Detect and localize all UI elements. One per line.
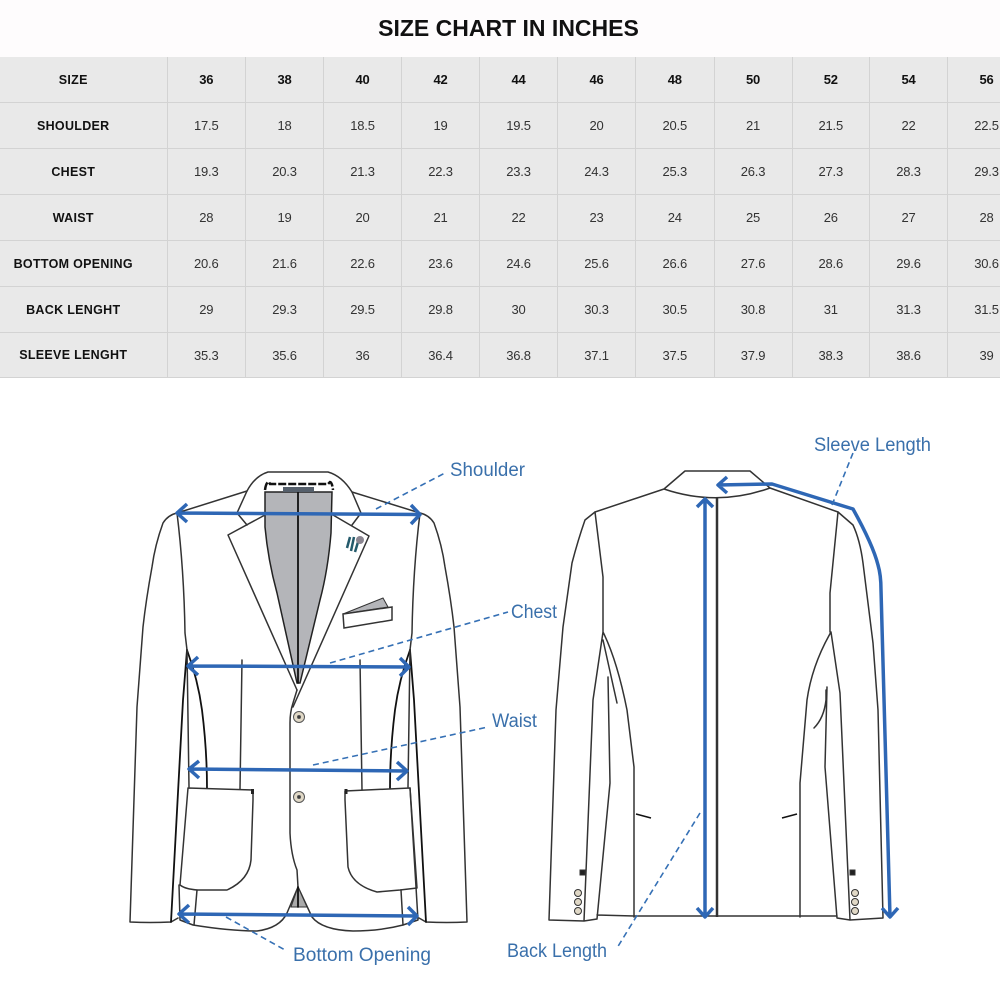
size chart table: SLEEVE LENGHT bbox=[19, 348, 127, 362]
size chart table: CHEST bbox=[51, 164, 95, 178]
size chart table: 25.3 bbox=[662, 164, 687, 179]
size chart table: 36 bbox=[199, 72, 213, 87]
size chart table: 21 bbox=[433, 210, 448, 225]
size chart table: 22 bbox=[901, 118, 916, 133]
size chart table: 20.6 bbox=[194, 256, 218, 271]
size chart table: 21.3 bbox=[350, 164, 375, 179]
size chart table: 29.8 bbox=[428, 302, 453, 317]
size chart table: 37.9 bbox=[741, 348, 765, 362]
size chart table: 20.3 bbox=[272, 164, 297, 179]
size chart table: 35.6 bbox=[272, 348, 297, 362]
pocket square bbox=[343, 598, 392, 628]
dashed leader lines bbox=[226, 453, 853, 950]
size chart table: WAIST bbox=[53, 210, 94, 224]
size chart table: 21.6 bbox=[272, 256, 297, 271]
centre back seam bbox=[716, 498, 718, 917]
label: sleeve length: Sleeve Length bbox=[814, 435, 931, 456]
size chart table: 44 bbox=[511, 72, 526, 87]
size chart table: 31.3 bbox=[896, 302, 921, 317]
size chart table: 18 bbox=[277, 118, 292, 133]
back jacket bbox=[549, 471, 883, 921]
size chart table: 40 bbox=[355, 72, 370, 87]
size chart table: 54 bbox=[901, 72, 916, 87]
size chart table: 28.3 bbox=[896, 164, 921, 179]
size chart table: SHOULDER bbox=[37, 118, 110, 132]
collar and shoulders bbox=[595, 471, 838, 512]
size chart table: 22.3 bbox=[428, 164, 453, 179]
size chart table: 27.6 bbox=[741, 256, 765, 271]
size chart table: 28 bbox=[199, 210, 213, 225]
size chart table: BACK LENGHT bbox=[26, 302, 120, 316]
size chart table: 30.3 bbox=[584, 302, 609, 317]
size chart table: 24 bbox=[668, 210, 682, 225]
size chart table: 30.5 bbox=[662, 302, 687, 317]
label: shoulder: Shoulder bbox=[450, 460, 526, 481]
title: SIZE CHART IN INCHES bbox=[378, 15, 639, 41]
size chart table: 38.6 bbox=[896, 348, 921, 362]
size chart table: 29.5 bbox=[350, 302, 375, 317]
size chart table: 18.5 bbox=[350, 118, 375, 133]
size chart table: 22.5 bbox=[974, 118, 999, 133]
size chart table: 26.6 bbox=[662, 256, 687, 271]
size chart table: 36.4 bbox=[428, 348, 453, 362]
size chart table: 28.6 bbox=[818, 256, 843, 271]
boutonniere bbox=[347, 536, 364, 552]
size chart table bbox=[0, 57, 1000, 378]
size chart table: 37.1 bbox=[584, 348, 609, 362]
size chart table: 50 bbox=[746, 72, 760, 87]
label: bottom opening: Bottom Opening bbox=[293, 945, 431, 966]
cuff buttons bbox=[574, 870, 858, 914]
title bbox=[0, 0, 1000, 57]
size chart table: 19 bbox=[277, 210, 292, 225]
size chart table: 38.3 bbox=[818, 348, 843, 362]
right sleeve and panels bbox=[800, 512, 883, 920]
size chart table: 31 bbox=[824, 302, 838, 317]
size chart table: 42 bbox=[433, 72, 448, 87]
size chart table: 27.3 bbox=[818, 164, 843, 179]
size chart table: 36.8 bbox=[506, 348, 531, 362]
size chart table: 20 bbox=[589, 118, 604, 133]
size chart table: 19.5 bbox=[506, 118, 531, 133]
size chart table: 20 bbox=[355, 210, 370, 225]
size chart table: 22.6 bbox=[350, 256, 375, 271]
size chart table: BOTTOM OPENING bbox=[14, 256, 133, 270]
size chart table: 30 bbox=[511, 302, 526, 317]
size chart table: 27 bbox=[901, 210, 916, 225]
size chart table: 20.5 bbox=[662, 118, 687, 133]
size chart table: 35.3 bbox=[194, 348, 218, 362]
front jacket bbox=[130, 472, 467, 931]
size chart table: 38 bbox=[277, 72, 292, 87]
size chart table: 29.3 bbox=[974, 164, 999, 179]
size chart table: 21 bbox=[746, 118, 760, 133]
size chart table: 22 bbox=[511, 210, 526, 225]
collar stitching and label bbox=[265, 482, 333, 492]
size chart table: 19.3 bbox=[194, 164, 218, 179]
size chart table: SIZE bbox=[59, 72, 88, 86]
label: chest: Chest bbox=[511, 602, 558, 623]
pocket tacks bbox=[252, 789, 346, 794]
size chart table: 56 bbox=[979, 72, 994, 87]
size chart table: 25.6 bbox=[584, 256, 609, 271]
size chart table: 23.6 bbox=[428, 256, 453, 271]
measurement arrows bbox=[177, 477, 898, 925]
size chart table: 21.5 bbox=[818, 118, 843, 133]
buttons bbox=[294, 712, 304, 802]
vent marks bbox=[636, 814, 797, 818]
size chart table: 39 bbox=[979, 348, 994, 362]
size chart table: 26 bbox=[824, 210, 838, 225]
size chart table: 37.5 bbox=[662, 348, 687, 362]
size chart table: 24.3 bbox=[584, 164, 609, 179]
size chart table: 23 bbox=[589, 210, 604, 225]
jacket outline and seams bbox=[130, 472, 467, 931]
size chart table: 48 bbox=[668, 72, 682, 87]
left sleeve and panels bbox=[549, 512, 837, 921]
size chart table: 17.5 bbox=[194, 118, 218, 133]
size chart table: 24.6 bbox=[506, 256, 531, 271]
size chart table: 23.3 bbox=[506, 164, 531, 179]
size chart table: 31.5 bbox=[974, 302, 999, 317]
size chart table: 28 bbox=[979, 210, 994, 225]
size chart table: 52 bbox=[824, 72, 838, 87]
size chart table: 30.6 bbox=[974, 256, 999, 271]
size chart table: 29.3 bbox=[272, 302, 297, 317]
size chart table: 46 bbox=[589, 72, 604, 87]
size chart table: 19 bbox=[433, 118, 448, 133]
label: waist: Waist bbox=[492, 711, 538, 732]
label: back length: Back Length bbox=[507, 941, 607, 962]
size chart table: 30.8 bbox=[741, 302, 765, 317]
size chart table: 26.3 bbox=[741, 164, 765, 179]
shirt front bbox=[265, 492, 332, 683]
size chart table: 29.6 bbox=[896, 256, 921, 271]
size chart table: 25 bbox=[746, 210, 760, 225]
size chart table: 36 bbox=[355, 348, 370, 362]
size chart table: 29 bbox=[199, 302, 213, 317]
